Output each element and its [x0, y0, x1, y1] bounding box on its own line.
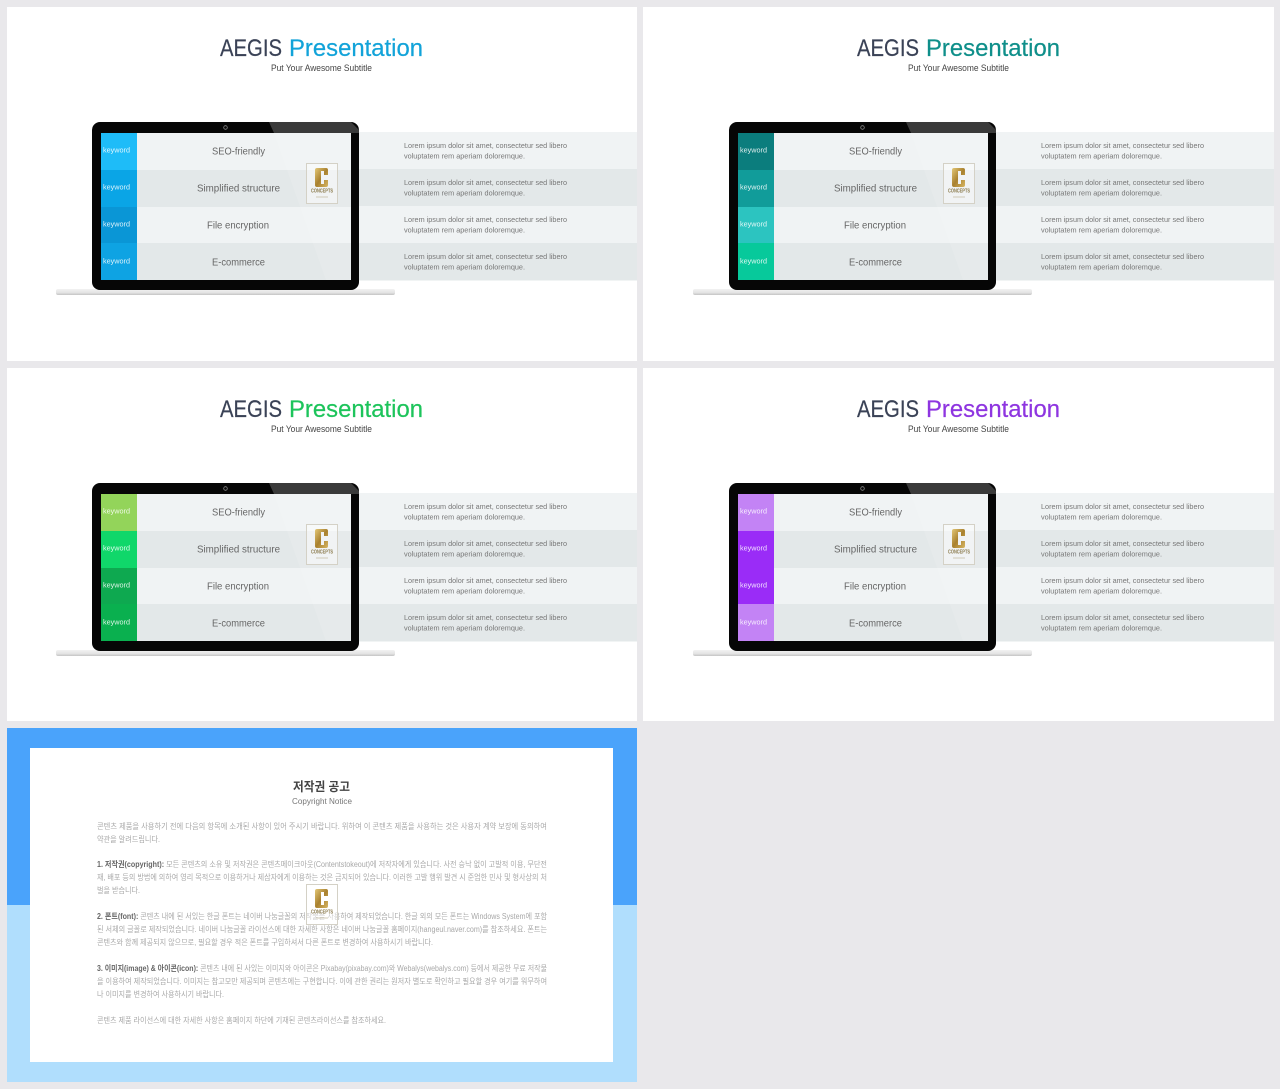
laptop: E-commerce: [849, 256, 902, 268]
laptop: SEO-friendly: [212, 506, 266, 518]
laptop: keyword: [740, 146, 767, 154]
title: [220, 396, 423, 423]
description strips: voluptatem rem aperiam doloremque.: [404, 226, 525, 234]
laptop: Simplified structure: [197, 182, 280, 194]
description strips: voluptatem rem aperiam doloremque.: [404, 624, 525, 632]
description strips: Lorem ipsum dolor sit amet, consectetur sed libero: [404, 141, 567, 150]
subtitle: Put Your Awesome Subtitle: [271, 424, 372, 434]
description strips: voluptatem rem aperiam doloremque.: [404, 512, 525, 522]
description strips: [996, 493, 1274, 642]
panel: slide 1 blue: [7, 7, 637, 361]
laptop: [693, 483, 1032, 656]
description strips: Lorem ipsum dolor sit amet, consectetur sed libero: [1041, 576, 1204, 585]
panel: slide 4 purple: [643, 368, 1274, 721]
laptop: keyword: [740, 220, 767, 228]
description strips: Lorem ipsum dolor sit amet, consectetur sed libero: [404, 252, 567, 261]
laptop: File encryption: [844, 580, 906, 592]
section 1: copyright: 재, 배포 등의 방법에 의하여 영리 목적으로 이용하거나 제삼자에게 이용하는 것은 금지되어 있습니다. 이러한 고발 행위 발견 시 준엄한 민사 및 형사상의 처: [97, 872, 547, 882]
panel: copyright notice: [7, 728, 637, 1082]
section 3: image and icon: [97, 963, 547, 999]
title: [857, 396, 1060, 423]
description strips: Lorem ipsum dolor sit amet, consectetur sed libero: [1041, 502, 1204, 511]
section 3: image and icon: 3. 이미지(image) & 아이콘(icon): 콘텐츠 내에 된 사있는 이미지와 아이콘은 Pixabay(pixabay.com)와 Webalys(webalys.com) 등에서 제공한 무료 저작물: [97, 963, 547, 973]
description strips: Lorem ipsum dolor sit amet, consectetur sed libero: [404, 502, 567, 511]
laptop: keyword: [740, 182, 767, 192]
laptop: keyword: [103, 220, 130, 228]
description strips: Lorem ipsum dolor sit amet, consectetur sed libero: [404, 215, 567, 224]
laptop: [56, 483, 395, 656]
section 1: copyright: 벌을 받습니다.: [97, 885, 140, 895]
description strips: voluptatem rem aperiam doloremque.: [1041, 586, 1162, 596]
logo: [944, 524, 974, 564]
laptop: E-commerce: [212, 256, 265, 268]
closing line: 콘텐츠 제품 라이선스에 대한 자세한 사항은 홈페이지 하단에 기재된 콘텐츠라이선스를 참조하세요.: [97, 1015, 386, 1025]
description strips: voluptatem rem aperiam doloremque.: [404, 152, 525, 160]
section 2: font: 2. 폰트(font): 콘텐츠 내에 된 서있는 한글 폰트는 네이버 나눔글꼴의 저작물을 사용하여 제작되었습니다. 한글 외의 모든 폰트는 Windows System에 포함: [97, 911, 548, 921]
laptop: SEO-friendly: [849, 506, 903, 518]
laptop: E-commerce: [849, 618, 902, 630]
laptop: keyword: [103, 146, 130, 154]
copyright subheading: Copyright Notice: [292, 796, 352, 806]
title: [857, 35, 1060, 62]
title: AEGIS: [220, 396, 282, 423]
description strips: Lorem ipsum dolor sit amet, consectetur sed libero: [404, 576, 567, 585]
subtitle: Put Your Awesome Subtitle: [271, 63, 372, 73]
description strips: voluptatem rem aperiam doloremque.: [1041, 226, 1162, 234]
description strips: [996, 132, 1274, 280]
description strips: voluptatem rem aperiam doloremque.: [404, 586, 525, 596]
description strips: voluptatem rem aperiam doloremque.: [1041, 512, 1162, 522]
laptop: Simplified structure: [197, 544, 280, 556]
description strips: voluptatem rem aperiam doloremque.: [404, 188, 525, 198]
description strips: Lorem ipsum dolor sit amet, consectetur sed libero: [1041, 613, 1204, 622]
section 3: image and icon: 을 이용하여 제작되었습니다. 이미지는 참고모만 제공되며 콘텐츠에는 구현합니다. 이에 관한 권리는 원저자 별도로 확인하고 필요할 경우 여기를 워무하여: [97, 976, 547, 986]
title: [220, 35, 423, 62]
description strips: Lorem ipsum dolor sit amet, consectetur sed libero: [1041, 141, 1204, 150]
logo: [944, 164, 974, 204]
intro paragraph: 약관을 알려드립니다.: [97, 834, 160, 844]
description strips: [359, 132, 637, 280]
logo: [306, 164, 338, 204]
intro paragraph: [97, 821, 547, 844]
subtitle: Put Your Awesome Subtitle: [908, 63, 1009, 73]
subtitle: Put Your Awesome Subtitle: [908, 424, 1009, 434]
description strips: Lorem ipsum dolor sit amet, consectetur sed libero: [1041, 252, 1204, 261]
logo: CONCEPTS: [311, 188, 334, 194]
laptop: keyword: [740, 618, 767, 626]
title: Presentation: [926, 35, 1060, 62]
description strips: voluptatem rem aperiam doloremque.: [404, 262, 525, 272]
logo watermark: [306, 884, 338, 924]
laptop: File encryption: [207, 580, 269, 592]
logo watermark: CONCEPTS: [311, 910, 334, 916]
section 1: copyright: [97, 859, 547, 895]
description strips: Lorem ipsum dolor sit amet, consectetur sed libero: [404, 178, 567, 187]
description strips: voluptatem rem aperiam doloremque.: [1041, 262, 1162, 272]
title: Presentation: [289, 396, 423, 423]
laptop: Simplified structure: [834, 544, 917, 556]
laptop: keyword: [740, 506, 767, 516]
laptop: E-commerce: [212, 618, 265, 630]
laptop: [693, 122, 1032, 295]
section 2: font: 콘텐츠와 함께 제공되지 않으므로, 필요할 경우 적은 폰트를 구입하셔서 다른 폰트로 변경하여 사용하시기 바랍니다.: [97, 937, 433, 947]
laptop: SEO-friendly: [212, 146, 266, 158]
title: Presentation: [926, 396, 1060, 423]
description strips: voluptatem rem aperiam doloremque.: [1041, 624, 1162, 632]
description strips: Lorem ipsum dolor sit amet, consectetur sed libero: [1041, 539, 1204, 548]
title: AEGIS: [857, 35, 919, 62]
panel: slide 2 teal: [643, 7, 1274, 361]
description strips: voluptatem rem aperiam doloremque.: [1041, 152, 1162, 160]
logo: CONCEPTS: [948, 550, 971, 556]
laptop: File encryption: [844, 220, 906, 232]
title: AEGIS: [220, 35, 282, 62]
description strips: Lorem ipsum dolor sit amet, consectetur sed libero: [1041, 178, 1204, 187]
laptop: keyword: [103, 182, 130, 192]
description strips: voluptatem rem aperiam doloremque.: [404, 550, 525, 558]
logo: [306, 524, 338, 564]
laptop: keyword: [103, 544, 130, 552]
description strips: Lorem ipsum dolor sit amet, consectetur sed libero: [1041, 215, 1204, 224]
description strips: Lorem ipsum dolor sit amet, consectetur sed libero: [404, 613, 567, 622]
laptop: keyword: [103, 618, 130, 626]
laptop: keyword: [740, 256, 767, 266]
laptop: keyword: [740, 580, 767, 590]
description strips: [359, 493, 637, 642]
logo: CONCEPTS: [948, 188, 971, 194]
laptop: keyword: [740, 544, 767, 552]
laptop: keyword: [103, 580, 130, 590]
laptop: keyword: [103, 506, 130, 516]
section 2: font: 된 서체의 글꼴로 제작되었습니다. 네이버 나눔글꼴 라이선스에 대한 자세한 사항은 네이버 나눔글꼴 홈페이지(hangeul.naver.com)를 참조하세요. 폰트는: [97, 924, 547, 934]
description strips: voluptatem rem aperiam doloremque.: [1041, 188, 1162, 198]
laptop: Simplified structure: [834, 182, 917, 194]
copyright heading: 저작권 공고: [293, 779, 350, 794]
laptop: [56, 122, 395, 295]
description strips: Lorem ipsum dolor sit amet, consectetur sed libero: [404, 539, 567, 548]
laptop: keyword: [103, 256, 130, 266]
section 2: font: [97, 911, 548, 947]
intro paragraph: 콘텐츠 제품을 사용하기 전에 다음의 항목에 소개된 사항이 있어 주시기 바랍니다. 위하여 이 콘텐츠 제품을 사용하는 것은 사용자 계약 보장에 동의하여: [97, 821, 547, 831]
logo: CONCEPTS: [311, 550, 334, 556]
section 3: image and icon: 나 이미지를 변경하여 사용하시기 바랍니다.: [97, 989, 224, 999]
title: AEGIS: [857, 396, 919, 423]
title: Presentation: [289, 35, 423, 62]
section 1: copyright: 1. 저작권(copyright): 모든 콘텐츠의 소유 및 저작권은 콘텐츠메이크아웃(Contentstokeout)에 저작자에게 있습니다. 사전 승낙 없이 고발적 이용, 무단전: [97, 859, 547, 869]
description strips: voluptatem rem aperiam doloremque.: [1041, 550, 1162, 558]
laptop: File encryption: [207, 220, 269, 232]
laptop: SEO-friendly: [849, 146, 903, 158]
panel: slide 3 green: [7, 368, 637, 721]
